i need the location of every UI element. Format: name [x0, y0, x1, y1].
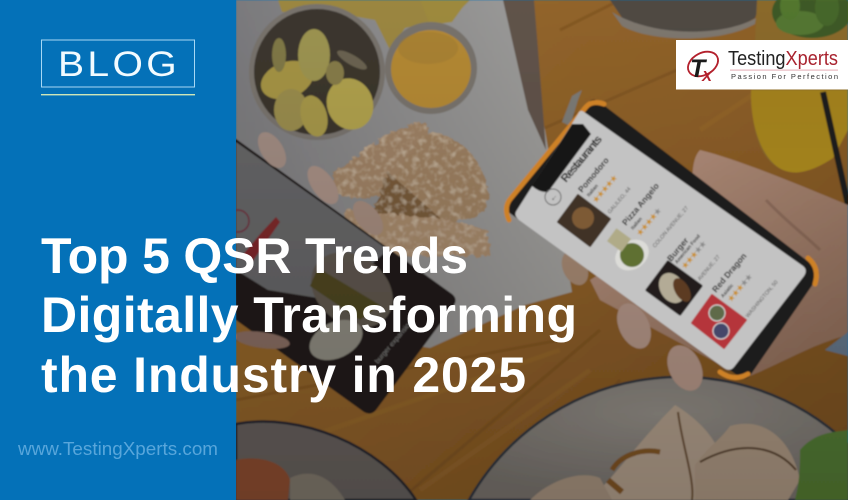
title: the Industry in 2025	[41, 347, 526, 403]
blog badge	[41, 40, 195, 95]
wood table	[236, 0, 848, 500]
row: Pomodoro: Italian	[586, 183, 600, 198]
row: Burger: Burger	[665, 235, 691, 263]
row: Pizza Angelo: ★★★★★	[635, 206, 665, 239]
screen	[236, 142, 388, 300]
row: Pizza Angelo: Italian	[630, 216, 644, 231]
back button	[545, 189, 561, 205]
row: Pomodoro: ★★★★★	[591, 173, 621, 206]
icon: TX mark: X	[701, 68, 713, 85]
panel: blue sidebar	[0, 0, 236, 500]
fried chicken	[332, 122, 490, 256]
burger on screen	[296, 237, 408, 368]
row: Burger: AVENUE, 27	[697, 254, 722, 282]
logo tagline: Passion For Perfection	[731, 72, 838, 81]
logo box	[676, 40, 848, 90]
orange case corners	[506, 103, 816, 378]
left plate	[236, 422, 416, 500]
dark photo overlay	[236, 0, 848, 500]
straw	[823, 92, 848, 205]
back button: ←	[546, 190, 560, 204]
metal pot top right	[610, 0, 762, 34]
row: Red Dragon: ★★★★★	[726, 272, 756, 305]
row: Red Dragon: Red Dragon	[710, 251, 748, 294]
row: Burger: American Food	[674, 234, 702, 265]
title	[41, 228, 577, 403]
row: Red Dragon	[692, 251, 780, 348]
row: Red Dragon: WASHINGTON, 50	[745, 280, 780, 319]
fingers below phone	[610, 298, 658, 354]
row: Pizza Angelo: COLON AVENUE, 27	[652, 205, 690, 249]
app heading: Restaurants	[559, 134, 605, 185]
row: Pizza Angelo	[607, 181, 690, 277]
screen	[515, 111, 806, 370]
fork	[562, 90, 582, 126]
logo name: TestingXperts	[728, 47, 838, 70]
row: Red Dragon: Asiatic	[720, 283, 735, 299]
hand holding phone	[557, 150, 848, 397]
row: Pomodoro: GALILEO, 44	[607, 186, 633, 215]
title: Top 5 QSR Trends	[41, 228, 468, 284]
paper liner	[236, 0, 572, 348]
meat slices	[590, 405, 722, 500]
row: Pomodoro	[558, 155, 633, 246]
blog badge: BLOG	[58, 45, 180, 84]
red badge	[240, 217, 280, 262]
glass of juice with mint	[751, 0, 848, 172]
fries	[278, 0, 470, 50]
row: Pomodoro: Pomodoro	[576, 155, 611, 194]
phone case	[506, 101, 818, 378]
lettuce	[795, 430, 848, 500]
right plate	[469, 377, 848, 500]
row: Pizza Angelo: Pizza Angelo	[620, 181, 661, 227]
sauce cup	[385, 22, 477, 114]
metal bowl with pickles	[249, 4, 385, 140]
background photo: restaurant table	[227, 0, 848, 500]
main phone with restaurant app	[506, 101, 818, 378]
title: Digitally Transforming	[41, 287, 577, 343]
fingers on left phone	[233, 127, 389, 352]
row: Burger: ★★★★★	[680, 239, 710, 272]
notch	[532, 124, 591, 192]
icon: TX mark	[684, 47, 722, 85]
knife handle	[503, 0, 546, 150]
sleeve	[825, 332, 848, 356]
icon: TX mark: T	[690, 55, 708, 83]
row: Burger	[647, 234, 722, 314]
website url: www.TestingXperts.com	[17, 438, 218, 459]
watermark text on back: burger expansion	[374, 319, 414, 365]
left phone body	[227, 136, 456, 414]
